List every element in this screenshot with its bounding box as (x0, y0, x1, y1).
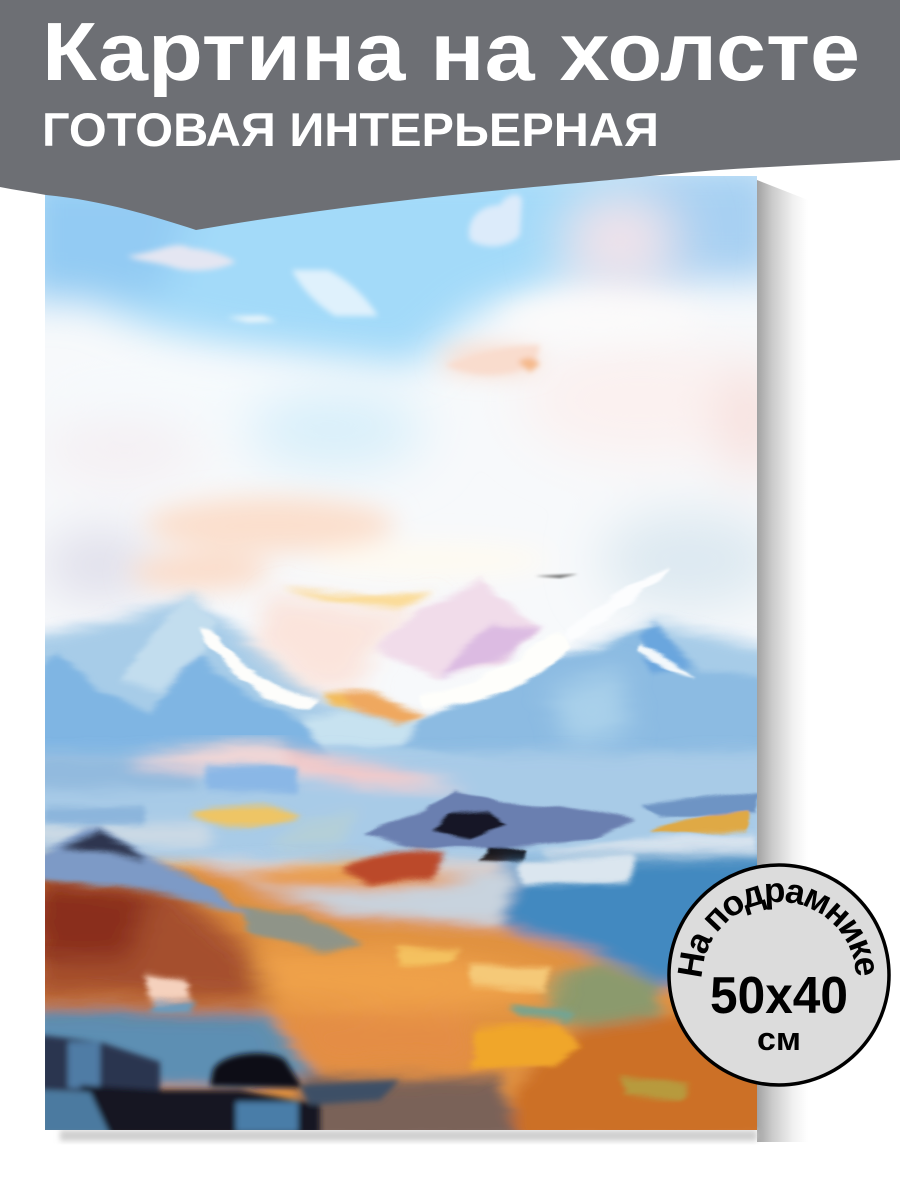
dark foreground rocks (40, 1035, 400, 1135)
size badge (667, 863, 891, 1087)
sky (20, 160, 780, 610)
painting: abstract mountain landscape (20, 160, 780, 1145)
warm foreground (30, 826, 780, 1145)
canvas shadow (60, 180, 808, 1142)
mountains (45, 568, 757, 764)
badge size: 50x40 (710, 967, 848, 1025)
lake and reflections (30, 742, 770, 880)
header banner (0, 0, 900, 230)
badge arc label: На подрамнике (678, 883, 874, 977)
badge unit: см (757, 1021, 801, 1057)
title: Картина на холсте (42, 5, 860, 98)
subtitle: ГОТОВАЯ ИНТЕРЬЕРНАЯ (42, 103, 659, 156)
